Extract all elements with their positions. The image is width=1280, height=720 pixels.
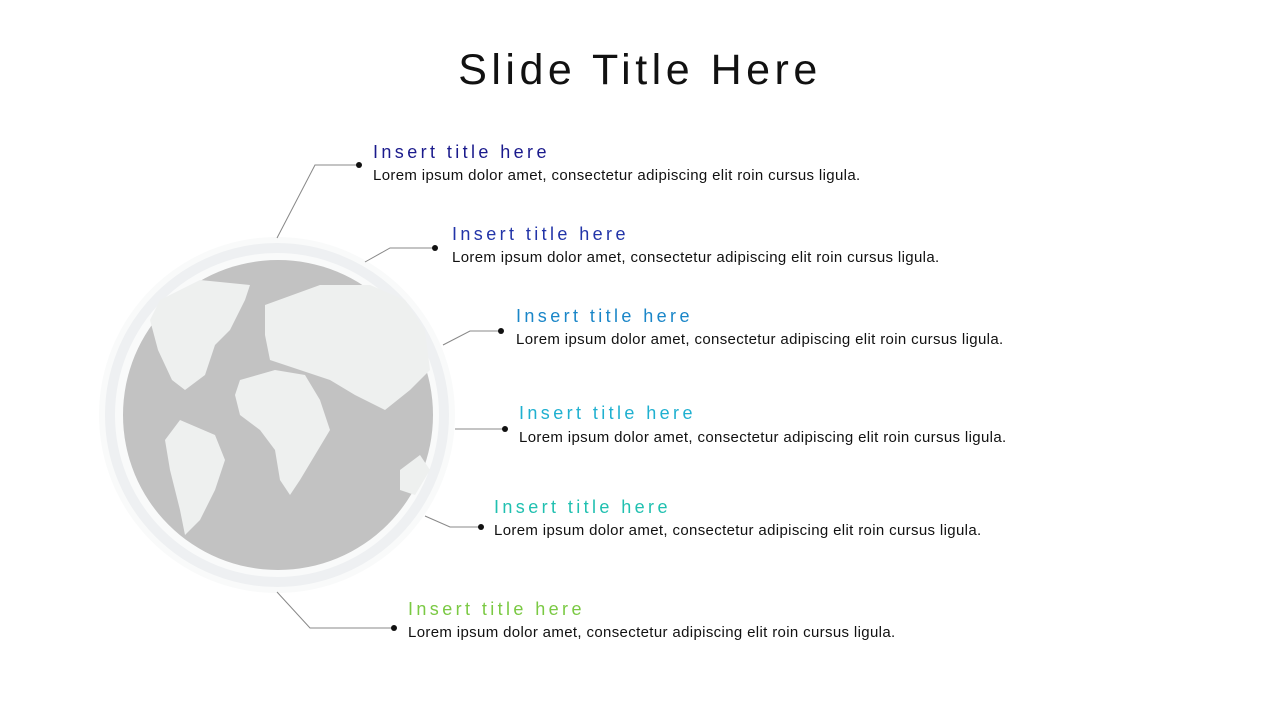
item 5 [494,497,982,539]
item 3 [516,306,1004,348]
text: Insert title here [494,497,671,517]
text: Insert title here [373,142,550,162]
text: Lorem ipsum dolor amet, consectetur adipiscing elit roin cursus ligula. [373,167,861,184]
globe [123,260,433,570]
text: Lorem ipsum dolor amet, consectetur adipiscing elit roin cursus ligula. [516,331,1004,348]
text: Insert title here [516,306,693,326]
text: Insert title here [452,224,629,244]
text: Lorem ipsum dolor amet, consectetur adipiscing elit roin cursus ligula. [452,249,940,266]
text: Lorem ipsum dolor amet, consectetur adipiscing elit roin cursus ligula. [494,522,982,539]
text: Insert title here [408,599,585,619]
text: Lorem ipsum dolor amet, consectetur adipiscing elit roin cursus ligula. [408,624,896,641]
text: Lorem ipsum dolor amet, consectetur adipiscing elit roin cursus ligula. [519,429,1007,446]
text: Insert title here [519,403,696,423]
connectors [277,165,505,628]
title: Slide Title Here [458,46,822,94]
item 4 [519,403,1007,446]
item 6 [408,599,896,641]
ring [99,237,455,593]
item 2 [452,224,940,266]
item 1 [373,142,861,184]
